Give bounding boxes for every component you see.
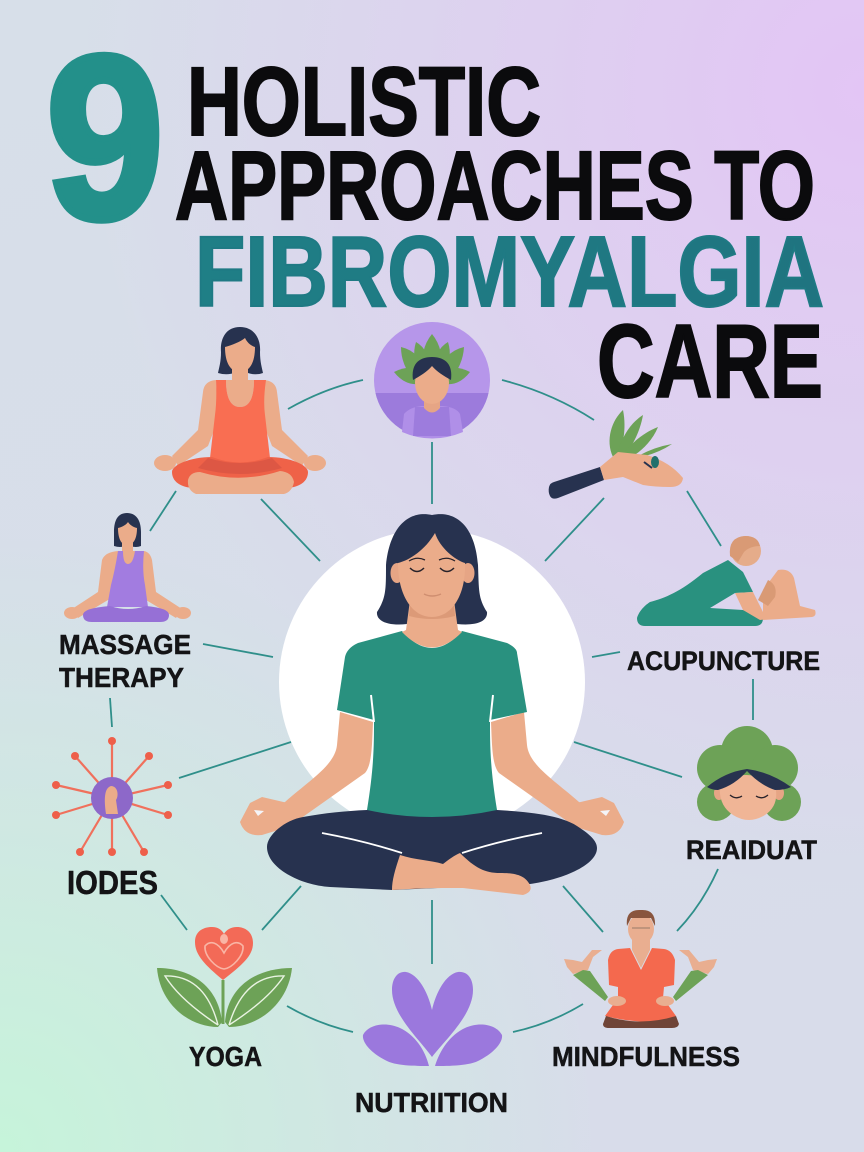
icon: herb meditation circle [370, 322, 494, 440]
shirt [337, 631, 527, 817]
icon: acupuncture hand and herb [549, 410, 683, 499]
central figure [240, 514, 624, 895]
label: massage therapy [59, 629, 191, 693]
legs [267, 810, 597, 890]
ears [390, 563, 404, 583]
green forearms [573, 970, 608, 1001]
white halo circle [279, 529, 585, 835]
arms [262, 712, 602, 826]
label: yoga: YOGA [189, 1041, 262, 1072]
shirt fold lines [371, 695, 493, 722]
icon: seated woman in coral [154, 327, 326, 494]
neck and chest [226, 365, 254, 407]
eyes, brows and mouth [409, 558, 455, 596]
neck [402, 600, 462, 648]
icon: massage figure [637, 536, 816, 626]
label: mindfulness: MINDFULNESS [552, 1041, 740, 1072]
head [632, 938, 650, 968]
big number 9: 9 [46, 8, 164, 268]
label: massage therapy: MASSAGE [59, 629, 191, 660]
raised hands [564, 950, 602, 974]
label: massage therapy: THERAPY [59, 662, 184, 693]
label: iodes: IODES [67, 864, 158, 901]
crossed legs [172, 457, 308, 488]
pants [603, 1016, 679, 1028]
small body [402, 406, 463, 438]
icon: man seated in coral [564, 910, 717, 1028]
resting hands [608, 996, 626, 1006]
connector lines [110, 380, 753, 1032]
icon: purple lotus [363, 972, 502, 1066]
hands [240, 797, 624, 835]
icon: tree head [697, 726, 801, 821]
title line: holistic: HOLISTIC [187, 47, 541, 156]
hair [377, 514, 487, 624]
foot [392, 853, 531, 895]
label: acupuncture: ACUPUNCTURE [627, 646, 820, 676]
icon: small seated purple figure [64, 513, 191, 622]
label: reaiduat: REAIDUAT [686, 835, 817, 865]
tank top [210, 380, 270, 464]
icon: heart flower with leaves [157, 927, 292, 1027]
leaves [394, 334, 470, 384]
arms [172, 380, 218, 466]
title [46, 8, 824, 420]
shirt [605, 948, 676, 1022]
icon: nodes network [52, 737, 172, 856]
label: nutrition: NUTRIITION [355, 1087, 508, 1118]
face [398, 533, 465, 617]
